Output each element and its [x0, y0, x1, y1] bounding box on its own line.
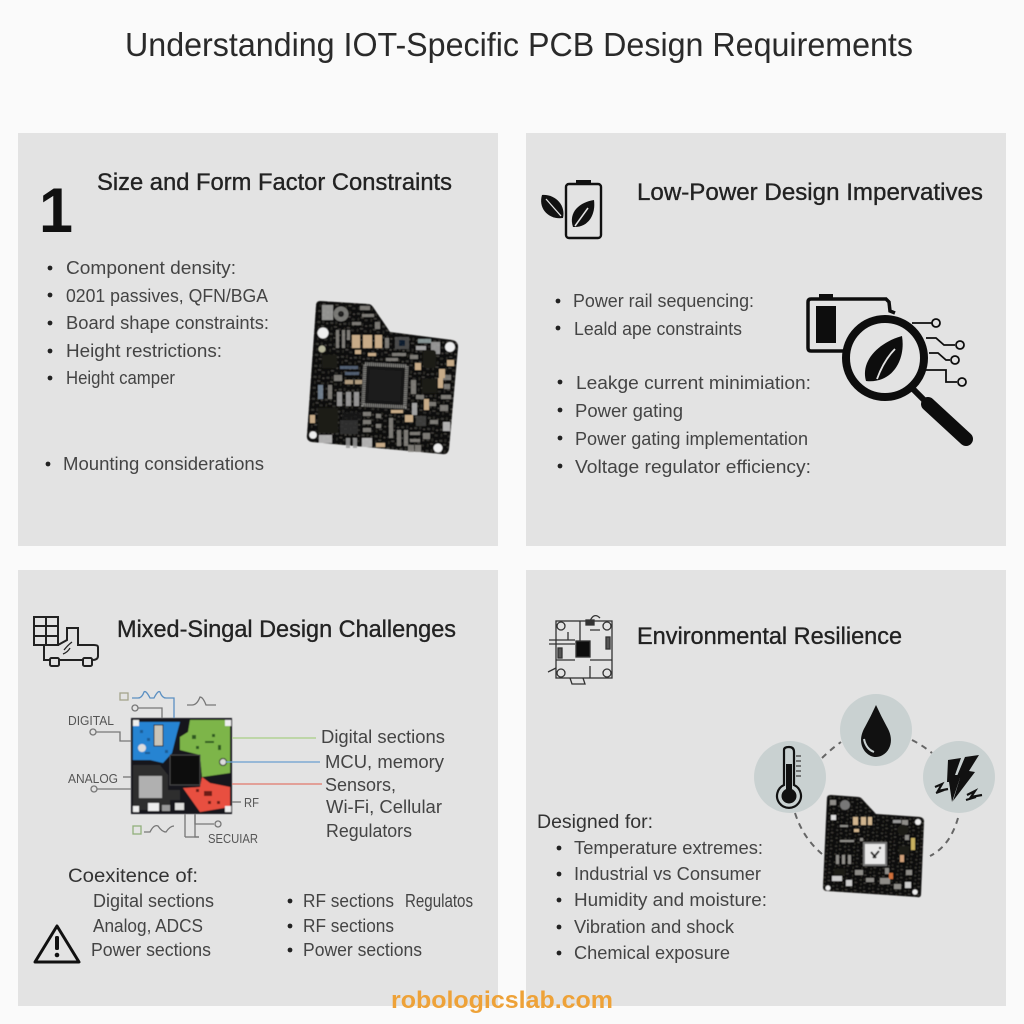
coexistence list left: Analog, ADCS — [93, 916, 203, 936]
bullet list: environment: Chemical exposure — [574, 943, 730, 963]
zone description list: Sensors, — [325, 775, 396, 795]
icon: battery with leaves — [541, 180, 601, 238]
bullet list: size constraints: Board shape constraints: — [66, 313, 269, 333]
zone labels: SECUIAR — [208, 831, 258, 846]
diagram: mixed-signal board zones — [68, 692, 322, 846]
zone labels: ANALOG — [68, 771, 118, 786]
panel: low-power design — [526, 133, 1006, 546]
icon: thermometer — [754, 741, 826, 813]
zone labels — [68, 713, 259, 846]
chip — [361, 362, 409, 409]
icon: water drop — [840, 694, 912, 766]
bullet list: size constraints: 0201 passives, QFN/BGA — [66, 286, 268, 306]
coexistence list right: RF sections — [303, 916, 394, 936]
board — [131, 718, 232, 814]
zone description list: Digital sections — [321, 727, 445, 747]
bullet list: power: Power gating implementation — [575, 429, 808, 449]
coexistence list left: Digital sections — [93, 891, 214, 911]
bullet list: environment — [557, 838, 767, 963]
coexistence list left — [91, 891, 214, 960]
coexistence list right: RF sections — [303, 891, 394, 911]
bullet list: size constraints: Mounting considerations — [63, 454, 264, 474]
image: rugged circuit board — [823, 795, 924, 897]
bullet list: environment: Temperature extremes: — [574, 838, 763, 858]
icon: grid and vehicle — [34, 617, 98, 666]
title: Understanding IOT-Specific PCB Design Requirements — [125, 26, 913, 63]
panel: size and form factor — [18, 133, 498, 546]
zone description list: Regulators — [326, 821, 412, 841]
image: IoT circuit board — [307, 301, 458, 454]
icon: warning triangle — [35, 926, 79, 962]
zone description list: MCU, memory — [325, 752, 444, 772]
coexistence list right: Power sections — [303, 940, 422, 960]
coexistence list left: Power sections — [91, 940, 211, 960]
zone description list: Wi-Fi, Cellular — [326, 797, 442, 817]
dashed connectors — [795, 740, 958, 856]
subheading: coexistence: Coexitence of: — [68, 866, 198, 887]
subheading: designed for: Designed for: — [537, 812, 653, 833]
icon: circuit outline — [548, 616, 612, 684]
icon: battery under magnifying glass with circuit traces — [808, 294, 966, 439]
zone labels: RF — [244, 795, 259, 810]
heading: environmental: Environmental Resilience — [637, 623, 902, 650]
bullet list: power: Leakge current minimiation: — [576, 373, 811, 393]
bullet list: size constraints: Component density: — [66, 258, 236, 278]
zone labels: DIGITAL — [68, 713, 114, 728]
coexistence list right: Regulatos — [405, 891, 473, 911]
coexistence list right — [288, 891, 473, 960]
heading: mixed-signal: Mixed-Singal Design Challenges — [117, 616, 456, 643]
heading: low-power design: Low-Power Design Impervatives — [637, 179, 983, 206]
zone callout lines — [90, 692, 322, 837]
footer: website: robologicslab.com — [391, 987, 613, 1014]
panel number: 1 — [39, 176, 73, 246]
bullet list: power: Leald ape constraints — [574, 319, 742, 339]
bullet list: size constraints — [46, 258, 269, 474]
panel: environmental resilience — [526, 570, 1006, 1006]
heading: size and form factor: Size and Form Factor Constraints — [97, 169, 452, 196]
bullet list: power: Voltage regulator efficiency: — [575, 457, 811, 477]
bullet list: size constraints: Height restrictions: — [66, 341, 222, 361]
bullet list: environment: Vibration and shock — [574, 917, 735, 937]
panel: mixed-signal design — [18, 570, 498, 1006]
bullet list: power: Power rail sequencing: — [573, 291, 754, 311]
bullet list: environment: Industrial vs Consumer — [574, 864, 761, 884]
bullet list: power: Power gating — [575, 401, 683, 421]
bullet list: size constraints: Height camper — [66, 368, 175, 388]
icon: lightning and vibration — [923, 741, 995, 813]
bullet list: environment: Humidity and moisture: — [574, 890, 767, 910]
zone description list — [321, 727, 445, 841]
bullet list: power — [556, 291, 811, 477]
